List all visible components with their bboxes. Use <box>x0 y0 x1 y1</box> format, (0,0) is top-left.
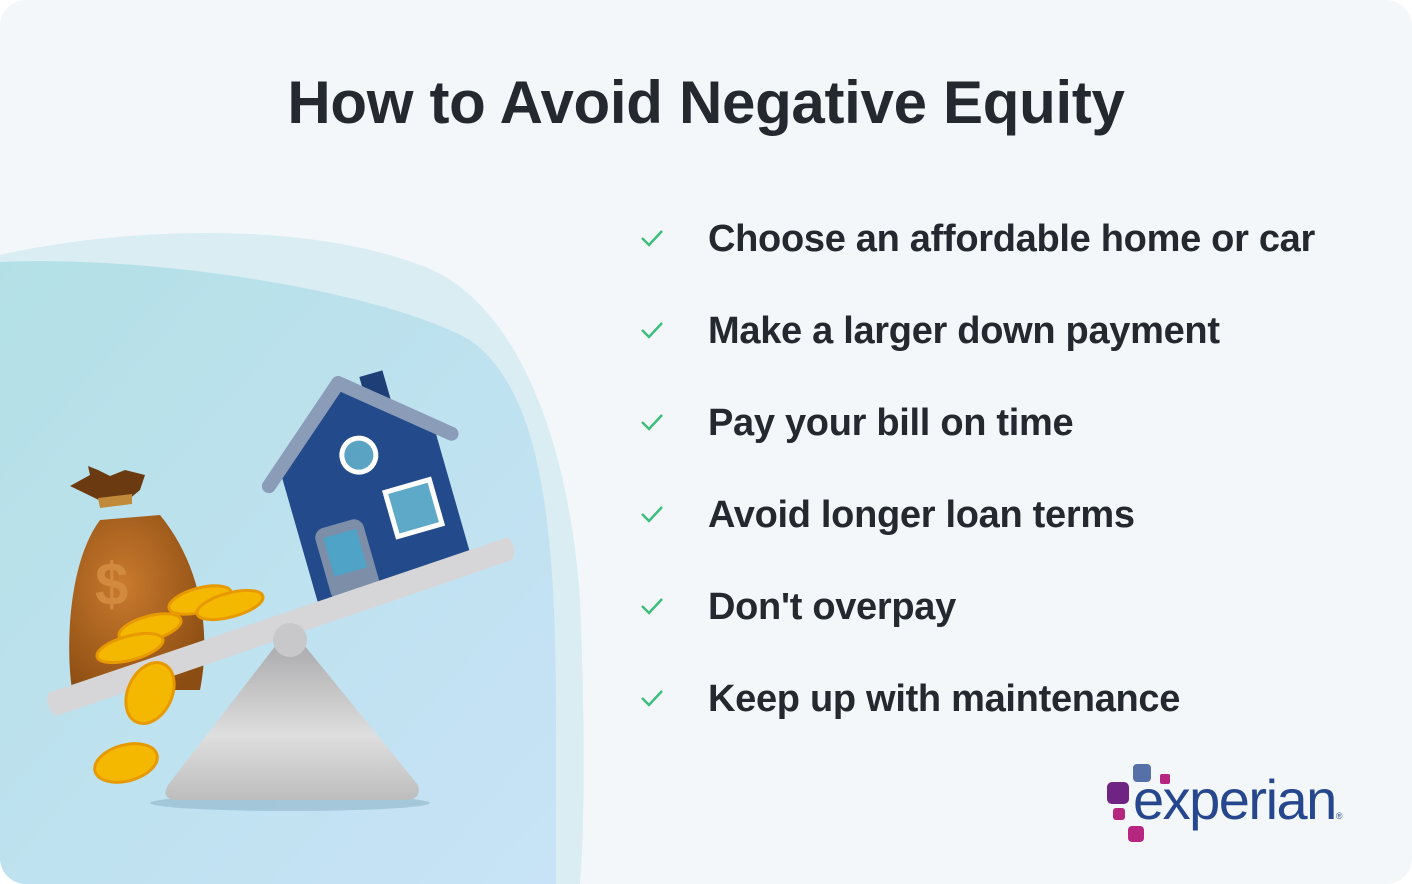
money bag <box>69 466 204 690</box>
item 5: Don't overpay <box>708 586 956 628</box>
logo: experian: experian® <box>1133 768 1341 831</box>
illustration: background blobs and seesaw <box>0 233 584 884</box>
item 4: Avoid longer loan terms <box>708 494 1135 536</box>
seesaw base <box>150 640 430 811</box>
checklist <box>641 218 1315 720</box>
item 1: Choose an affordable home or car <box>708 218 1315 260</box>
item 3: Pay your bill on time <box>708 402 1073 444</box>
money bag: $ <box>95 551 128 618</box>
house <box>247 357 487 611</box>
item 2: Make a larger down payment <box>708 310 1220 352</box>
beam <box>47 537 514 716</box>
coins <box>90 580 266 789</box>
item 6: Keep up with maintenance <box>708 678 1180 720</box>
title: How to Avoid Negative Equity <box>287 69 1125 136</box>
